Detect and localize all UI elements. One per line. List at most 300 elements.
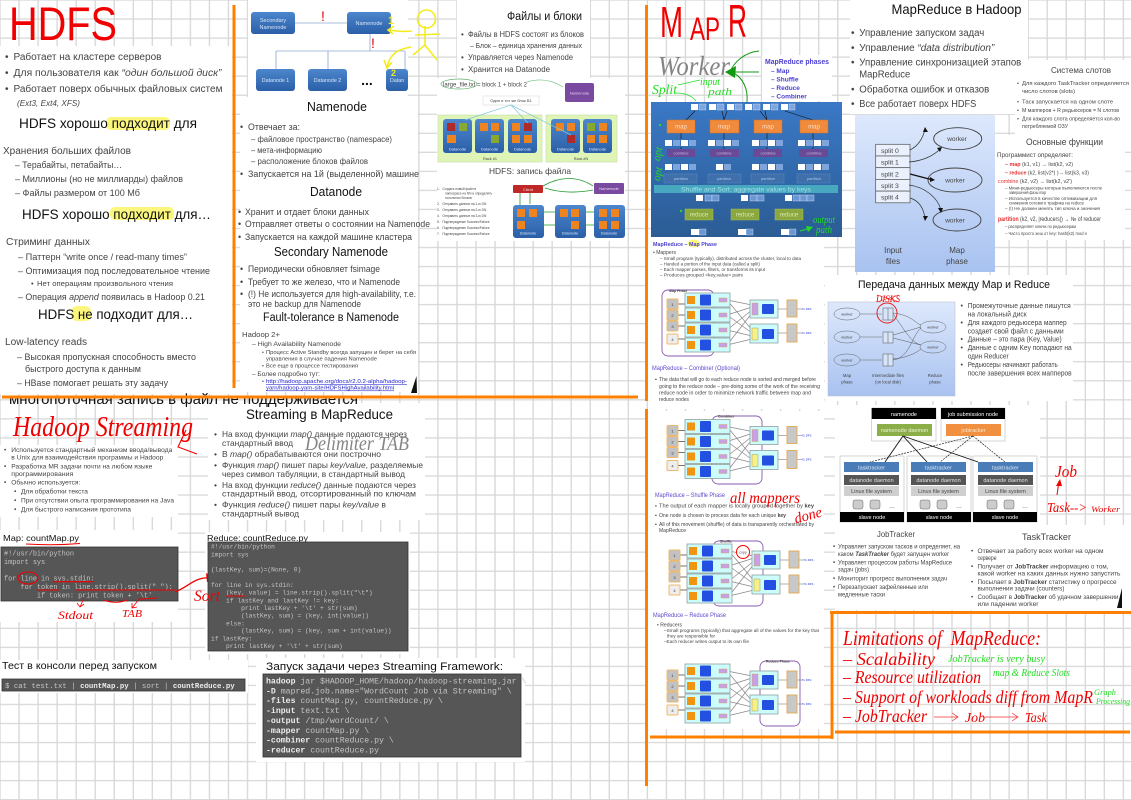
note: DISKS crossed out with circle (875, 294, 900, 323)
panel: files and blocks: – Блок – единица хранения данных (470, 43, 582, 50)
note: Job Task Worker (1047, 462, 1121, 516)
panel: reduce text: • Reducers (657, 622, 683, 628)
diagram: intermediate files: worker (841, 358, 853, 362)
panel: Datanode: Хранит и отдает блоки данных (245, 207, 369, 217)
diagram: hadoop cluster: slave node (992, 515, 1018, 521)
panel: Fault-tolerance: управления в случае падения Namenode (266, 356, 377, 362)
diagram: splits to workers: split 2 (881, 171, 899, 178)
panel: HDFS not suitable: – Высокая пропускная способность вместо (17, 352, 196, 363)
panel: Namenode: • (240, 122, 243, 132)
panel: HDFS file write: HDFS: запись файла (489, 166, 571, 176)
panel: Streaming in MapReduce: Функция map() пишет пары key/value, разделяемые (222, 460, 423, 470)
panel: HDFS suitable for big files: – Файлы размером от 100 Мб (15, 188, 141, 199)
panel: main functions: – Мини-редьюсеры которые выполняются после (1005, 186, 1103, 190)
panel: shuffle text: MapReduce (659, 528, 686, 534)
panel: HDFS overview: • (5, 68, 9, 79)
panel: HDFS file write: 1. Создать новый файл в (437, 187, 476, 191)
panel: shuffle text: ▪ (655, 504, 657, 510)
diagram: hadoop cluster (840, 408, 1037, 522)
panel: Datanode: Datanode (310, 185, 362, 199)
diagram: splits to workers: split 3 (881, 183, 899, 190)
diagram: hadoop cluster: … (1022, 504, 1028, 510)
note: Job Task Worker: Job (1055, 462, 1077, 481)
panel: Streaming in MapReduce: • (214, 429, 217, 439)
note: split and input path (652, 76, 733, 101)
diagram: namenode architecture: ! (321, 8, 325, 24)
panel: combiner text: reduce nodes (659, 397, 689, 403)
panel: HDFS file write (437, 166, 625, 238)
panel: Streaming in MapReduce: На вход функции map() данные подаются через (222, 429, 407, 439)
panel: Map phase text: MapReduce – Map Phase (653, 242, 717, 248)
panel: Datanode: Отправляет ответы о состоянии на Namenode (245, 219, 430, 229)
panel: Secondary Namenode: это не backup для Namenode (248, 299, 361, 309)
panel: combiner text (652, 366, 820, 403)
panel: Fault-tolerance (242, 312, 416, 392)
diagram: hadoop cluster: jobtracker (960, 428, 986, 434)
diagram: hadoop cluster: tasktracker (925, 466, 952, 472)
chart: MapReduce data flow: map (675, 124, 687, 130)
diagram: blocks across racks: Datanode (449, 146, 467, 152)
panel: Secondary Namenode: Требует то же железо, что и Namenode (248, 277, 400, 287)
note: output path and opt marks: output (813, 215, 835, 226)
code: reduce script: (lastKey, sum) = (key, sum + int(value)) (211, 628, 391, 635)
diagram: namenode architecture: Namenode (260, 25, 286, 31)
panel: streaming overview: • (14, 498, 17, 504)
panel: limitations of MapReduce: Limitations of MapReduce: (842, 626, 1041, 650)
panel: HDFS suitable for big files: HDFS хорошо подходит для (19, 116, 197, 131)
panel: HDFS not suitable (5, 306, 196, 389)
panel: Streaming in MapReduce: через символ табуляции, в стандартный вывод (222, 469, 405, 479)
panel: data transfer bullets: • (960, 362, 964, 369)
panel: TaskTracker: Посылает в JobTracker статистику о прогрессе (978, 579, 1117, 586)
panel: HDFS suitable for streaming: Стриминг данных (6, 237, 90, 248)
panel: slots system: • (1017, 81, 1019, 87)
code: streaming framework command: -reducer countReduce.py (266, 746, 379, 756)
code: map script: #!/usr/bin/python (4, 550, 74, 558)
diagram: intermediate files: Intermediate files (872, 373, 904, 378)
code: reduce script: if lastKey and lastKey != key: (211, 597, 339, 604)
code: reduce script: #!/usr/bin/python (211, 544, 275, 551)
chart: MapReduce data flow: combine (760, 150, 776, 156)
code: reduce script: (lastKey, sum)=(None, 0) (211, 567, 301, 574)
panel: Namenode: – расположение блоков файлов (251, 157, 368, 166)
chart: MapReduce data flow: reduce (690, 212, 709, 218)
legend: MapReduce phases (765, 59, 829, 100)
panel: JobTracker: JobTracker (877, 530, 915, 539)
diagram: namenode architecture: ... (361, 72, 373, 88)
panel: reduce text: MapReduce – Reduce Phase (653, 613, 727, 619)
panel: TaskTracker: сервере (978, 555, 997, 562)
panel: Secondary Namenode: Secondary Namenode (274, 245, 388, 259)
panel: HDFS overview: Работает на кластере серверов (14, 51, 162, 63)
panel: shuffle text: The output of each mapper is locally grouped together by key (659, 504, 814, 510)
panel: HDFS suitable for streaming: – Паттерн “write once / read-many times” (18, 252, 187, 263)
panel: files and blocks: Управляется через Namenode (468, 53, 574, 62)
code: reduce script: for line in sys.stdin: (211, 582, 294, 589)
panel: data transfer bullets: Данные с одним Key попадают на (968, 345, 1072, 352)
panel: main functions: – map (k1, v1) → list(k2, v2) (1005, 162, 1073, 168)
code: streaming framework command: -combiner countReduce.py \ (266, 736, 394, 746)
panel: main functions: combine (k2, v2) → list(k2, v2') (998, 179, 1072, 185)
diagram: splits to workers: files (886, 257, 900, 266)
diagram: intermediate files: phase (929, 380, 941, 384)
code: map script: if token: print token + '\t' (4, 592, 152, 600)
icon: yellow stick figure with arrows: 1 (388, 15, 394, 27)
panel: data transfer bullets: • (960, 320, 964, 327)
panel: Fault-tolerance: – High Availability Namenode (252, 341, 341, 348)
panel: JobTracker: • (833, 576, 835, 582)
panel: data transfer bullets: один Reducer (968, 354, 1009, 360)
panel: TaskTracker: TaskTracker (1022, 532, 1071, 542)
diagram: blocks across racks: Datanode (481, 146, 499, 152)
panel: HDFS suitable for streaming: – Операция append появилась в Hadoop 0.21 (18, 292, 205, 303)
diagram: combiner flow: Combiner (718, 414, 735, 418)
chart: MapReduce data flow: Shuffle and Sort: aggregate values by keys (681, 188, 811, 194)
panel: shuffle text (655, 493, 814, 534)
panel: Streaming in MapReduce: • (214, 449, 217, 459)
icon: black corner triangle (411, 376, 417, 393)
note: output path and opt marks: opt (651, 165, 665, 182)
panel: data transfer bullets: • (960, 345, 964, 352)
panel: main functions: – Используется в качестве оптимизации для (1005, 196, 1097, 201)
panel: JobTracker: задач (jobs) (838, 568, 869, 574)
code: console test (2, 661, 245, 691)
panel: files and blocks: Файлы в HDFS состоят из блоков (468, 30, 584, 39)
panel: Namenode: • (240, 169, 243, 179)
diagram: splits to workers: worker (944, 178, 966, 184)
panel: Streaming in MapReduce: Функция reduce() пишет пары key/value в (222, 500, 386, 510)
panel: data transfer bullets: на локальный диск (968, 310, 1028, 318)
panel: Fault-tolerance: yarn/hadoop-yarn-site/HDFSHighAvailability.html (266, 386, 394, 392)
panel: slots system: • (1017, 116, 1019, 122)
panel: JobTracker: • (833, 560, 835, 566)
diagram: hadoop cluster: Linux file system (985, 489, 1026, 495)
panel: Streaming in MapReduce: На вход функции reduce() данные подаются через (222, 480, 416, 490)
diagram: shuffle flow: copy (739, 550, 747, 554)
diagram: shuffle flow: Shuffle (720, 540, 732, 544)
panel: Map phase text: – Produces grouped <key,value> pairs (660, 272, 744, 278)
panel: limitations of MapReduce: – Support of workloads diff from MapR (842, 687, 1093, 707)
diagram: intermediate files: Reduce (928, 373, 943, 378)
panel: MapReduce in Hadoop: Обработка ошибок и отказов (859, 84, 989, 96)
diagram: hadoop cluster: datanode daemon (849, 478, 894, 484)
panel: TaskTracker: какой worker на каких данных нужно запустить (978, 570, 1121, 578)
panel: combiner text: going to the reduce node – pre-doing some of the work of the receiving (659, 384, 820, 390)
diagram: hadoop cluster: tasktracker (992, 466, 1019, 472)
panel: slots system: Для каждого TaskTracker определяется (1022, 81, 1129, 87)
panel: Map phase text: – Each mapper parses, filters, or transforms its input (660, 267, 766, 272)
diagram: reduce flow (667, 660, 811, 726)
chart: MapReduce data flow (651, 102, 842, 237)
panel: main functions: завершения фазы map (1009, 190, 1047, 195)
panel: HDFS not suitable: HDFS не подходит для… (38, 307, 193, 322)
panel: HDFS file write: Datanode (520, 232, 536, 236)
panel: Streaming in MapReduce: • (214, 460, 217, 470)
panel: streaming overview: При отсутствии опыта программирования на Java (21, 498, 174, 504)
panel: Datanode: • (238, 232, 241, 242)
code: streaming framework command: hadoop jar $HADOOP_HOME/hadoop/hadoop-streaming.jar \ (266, 676, 526, 686)
panel: Fault-tolerance: • (262, 379, 264, 385)
panel: Fault-tolerance: Процесс Active Standby всегда запущен и берет на себя (266, 350, 416, 356)
diagram: splits to workers: worker (944, 218, 966, 224)
panel: HDFS suitable for streaming: Нет операциям произвольного чтения (37, 279, 173, 288)
diagram: namenode architecture (251, 8, 408, 91)
panel: Streaming in MapReduce: Streaming в MapReduce (246, 406, 393, 422)
panel: Datanode: Запускается на каждой машине кластера (245, 232, 412, 242)
panel: Streaming in MapReduce: • (214, 500, 217, 510)
diagram: map phase flow: Map Phase (669, 289, 687, 293)
note: split and input path: path (707, 86, 733, 98)
panel: Datanode: • (238, 219, 241, 229)
diagram: blocks across racks: Rack #N (574, 157, 589, 161)
code: reduce script: print lastKey + '\t' + str(sum) (211, 643, 343, 650)
panel: HDFS overview: • (5, 52, 9, 63)
panel: combiner text: The data that will go to each reduce node is sorted and merged before (659, 377, 816, 383)
panel: Secondary Namenode: • (240, 264, 243, 274)
panel: shuffle text: ▪ (655, 513, 657, 519)
panel: shuffle text: ▪ (655, 522, 657, 528)
panel: streaming overview: в Unix для взаимодействия программы и Hadoop (11, 454, 164, 462)
panel: streaming overview: программирования (11, 471, 74, 478)
code: console test: $ cat test.txt | countMap.py | sort | countReduce.py (5, 683, 235, 691)
chart: MapReduce data flow: combine (716, 150, 732, 156)
panel: MapReduce in Hadoop: • (851, 99, 855, 110)
panel: Fault-tolerance: Hadoop 2+ (242, 330, 281, 339)
panel: Map phase text (653, 240, 801, 278)
note: split and input path: Split (652, 83, 678, 98)
panel: Secondary Namenode: • (240, 289, 243, 299)
panel: TaskTracker: • (971, 548, 973, 555)
panel: Streaming in MapReduce: стандартный ввод (222, 438, 293, 448)
code: console test: Тест в консоли перед запуском (2, 661, 157, 672)
text: clipped slide line under divider: многопоточная запись в файл не поддерживается (9, 391, 358, 408)
panel: data transfer bullets: Промежуточные данные пишутся (968, 303, 1071, 310)
panel: Secondary Namenode: (!) Не используется для high-availability, т.е. (248, 289, 416, 299)
panel: JobTracker: • (833, 585, 835, 591)
diagram: map phase flow (662, 289, 811, 356)
panel: JobTracker: медленные таски (838, 592, 885, 598)
diagram: hadoop cluster: job submission node (947, 412, 998, 418)
panel: streaming overview: Используется стандартный механизм ввода/вывода (11, 446, 173, 454)
panel: Secondary Namenode (240, 245, 416, 309)
chart: MapReduce data flow: reduce (780, 212, 799, 218)
panel: TaskTracker: • (971, 564, 973, 570)
panel: streaming overview (4, 446, 174, 514)
diagram: hadoop cluster: Linux file system (918, 489, 959, 495)
panel: files and blocks: • (461, 30, 464, 39)
diagram: splits to workers: split 1 (881, 160, 899, 167)
panel: shuffle text: MapReduce – Shuffle Phase (655, 493, 726, 499)
panel: MapReduce in Hadoop (851, 1, 1022, 110)
panel: HDFS suitable for streaming: – Оптимизация под последовательное чтение (18, 266, 210, 277)
diagram: namenode architecture: Datanode 2 (314, 78, 341, 84)
diagram: blocks across racks: Один и тот же блок B1 (490, 98, 533, 103)
panel: Streaming in MapReduce: стандартный ввод, отсортированный по ключам (222, 488, 416, 498)
panel: Namenode: Namenode (307, 100, 367, 114)
panel: streaming overview: • (4, 464, 7, 470)
panel: data transfer bullets: Редьюсеры начинают работать (968, 361, 1058, 369)
panel: files and blocks: • (461, 65, 464, 74)
panel: shuffle text: All of this movement (shuffle) of data is transparently orchestrated by (659, 522, 814, 528)
note: Job Task Worker: Worker (1091, 505, 1121, 514)
panel: Fault-tolerance: – Более подробно тут: (252, 370, 320, 378)
code: map script: TAB (122, 608, 142, 620)
code: map script: import sys (4, 559, 45, 567)
panel: Namenode: – файловое пространство (namespace) (251, 135, 392, 144)
diagram: blocks across racks: Datanode (514, 146, 532, 152)
diagram: splits to workers (855, 115, 995, 272)
panel: JobTracker: Управляет процессом работы MapReduce (838, 560, 953, 566)
panel: data transfer bullets: • (960, 336, 964, 344)
panel: main functions: partition (k2, v2, |reducers|) → № of reducer (998, 216, 1101, 223)
panel: HDFS overview: • (5, 84, 9, 95)
panel: MapR title (660, 0, 747, 47)
note: Worker handwriting: Worker (658, 51, 730, 81)
panel: files and blocks: • (461, 53, 464, 62)
diagram: namenode architecture: ! (371, 35, 375, 51)
panel: slots system (1017, 65, 1129, 130)
panel: limitations of MapReduce: Task (1025, 711, 1048, 726)
diagram: splits to workers: Input (884, 246, 903, 255)
panel: limitations of MapReduce (842, 626, 1130, 726)
diagram: splits to workers: phase (946, 257, 968, 266)
panel: MapReduce in Hadoop: MapReduce в Hadoop (892, 1, 1022, 17)
panel: JobTracker: Перезапускает зафейленные или (838, 584, 928, 591)
panel: HDFS file write: Datanode (601, 232, 617, 236)
panel: JobTracker: • (833, 544, 835, 550)
panel: reduce text: –Small programs (typically) that aggregate all of the values for the key that (664, 628, 820, 633)
panel: HDFS overview: Работает поверх обычных файловых систем (14, 83, 223, 95)
panel: Map phase text: • Mappers (653, 250, 677, 256)
panel: slots system: число слотов (slots) (1022, 89, 1075, 95)
panel: TaskTracker: • (971, 579, 973, 586)
code: map script: for token in line.strip().split(" "): (4, 584, 173, 592)
panel: slots system: потребляемой ОЗУ (1022, 123, 1068, 130)
chart: MapReduce data flow: combine (673, 150, 689, 156)
note: output path and opt marks: path (815, 225, 832, 236)
panel: JobTracker: каком TaskTracker будет запущен worker (838, 552, 949, 558)
diagram: splits to workers: split 4 (881, 195, 899, 202)
note: split and input path: input (700, 76, 721, 88)
panel: HDFS file write: топологию блоков (445, 196, 472, 200)
diagram: hadoop cluster: … (889, 504, 895, 510)
diagram: intermediate files: Map (843, 373, 852, 378)
code: streaming framework command: -output /tmp/wordCount/ \ (266, 716, 389, 726)
panel: data transfer bullets: создает свой файл с данными (968, 328, 1064, 336)
panel: HDFS suitable for big files: – Терабайты, петабайты… (15, 160, 122, 171)
chart: MapReduce data flow: partition (717, 176, 731, 181)
panel: limitations of MapReduce: map & Reduce Slots (993, 667, 1070, 679)
panel: JobTracker: Мониторит прогресс выполнения задач (838, 576, 947, 582)
panel: HDFS file write: 5. Подтверждение Success/Failure (437, 220, 490, 224)
panel: Fault-tolerance: Fault-tolerance в Namenode (263, 312, 399, 324)
panel: HDFS overview: Для пользователя как “один большой диск” (14, 67, 222, 79)
diagram: intermediate files: worker (927, 326, 939, 330)
diagram: namenode architecture: Datan (390, 78, 404, 84)
panel: MapReduce in Hadoop: • (851, 28, 855, 39)
panel: streaming overview: Для обработки текста (21, 488, 88, 496)
panel: slots system: Система слотов (1051, 65, 1111, 75)
panel: HDFS overview (5, 51, 223, 108)
diagram: splits to workers: Map (949, 246, 965, 255)
panel: reduce text: –Each reducer writes output to its own file (664, 639, 749, 644)
panel: Datanode: • (238, 207, 241, 217)
panel: HDFS file write: 7. Подтверждение Success/Failure (437, 232, 490, 236)
panel: data transfer bullets: Данные – это пара (Key, Value) (968, 336, 1062, 344)
code: streaming framework command: -files countMap.py, countReduce.py \ (266, 696, 443, 706)
diagram: hadoop cluster: slave node (859, 515, 885, 521)
panel: Namenode: Запускается на 1й (выделенной) машине (248, 169, 419, 179)
chart: MapReduce data flow: partition (807, 176, 821, 181)
panel: main functions: – reduce (k2, list(v2*) )→ list(k3, v3) (1005, 170, 1089, 176)
note: all mappers done: all mappers (730, 490, 800, 507)
panel: limitations of MapReduce: JobTracker is very busy (948, 654, 1046, 665)
panel: MapReduce in Hadoop: MapReduce (859, 70, 911, 80)
panel: streaming overview: • (4, 480, 7, 486)
panel: main functions: – распределяет ключи по редьюсерам (1005, 224, 1076, 229)
note: Job Task Worker: Task--> (1047, 501, 1087, 516)
panel: streaming overview: • (4, 447, 7, 454)
chart: MapReduce data flow: map (808, 124, 820, 130)
arrows: green pointers to Worker (725, 51, 759, 102)
panel: reduce text (653, 613, 820, 644)
diagram: blocks across racks: Datanode (557, 146, 575, 152)
panel: main functions (997, 137, 1103, 236)
panel: main functions: снижения сетевого трафика на reduce (1009, 200, 1085, 206)
panel: reduce text: they are responsible for (667, 634, 715, 638)
note: delimiter TAB: Delimiter TAB (304, 433, 409, 455)
diagram: hadoop cluster: namenode daemon (881, 428, 928, 434)
panel: TaskTracker: Отвечает за работу всех worker на одном (978, 547, 1104, 555)
panel: TaskTracker: Получает от JobTracker информацию о том, (978, 564, 1109, 570)
panel: MapReduce in Hadoop: • (851, 43, 855, 54)
panel: HDFS file write: namespace на NN и определить (445, 192, 493, 196)
code: reduce script: if lastKey: (211, 635, 252, 642)
panel: HDFS file write: Client (523, 187, 534, 192)
note: all mappers done (730, 490, 824, 527)
diagram: blocks across racks: large_file.txt = block 1 + block 2 (443, 82, 528, 88)
diagram: namenode architecture: Namenode (356, 21, 382, 27)
panel: data transfer bullets: • (960, 303, 964, 310)
panel: MapReduce in Hadoop: Управление запуском задач (859, 28, 984, 39)
panel: files and blocks (461, 11, 584, 74)
panel: HDFS overview: (Ext3, Ext4, XFS) (17, 98, 80, 108)
chart: MapReduce data flow: partition (761, 176, 775, 181)
legend: MapReduce phases: – Shuffle (771, 76, 799, 84)
icon: yellow stick figure with arrows: 2 (391, 68, 396, 78)
panel: HDFS not suitable: – HBase помогает решать эту задачу (17, 378, 168, 389)
panel: limitations of MapReduce: – Resource utilization (842, 667, 981, 687)
diagram: blocks across racks (438, 79, 617, 162)
panel: HDFS suitable for big files: – Миллионы (но не миллиарды) файлов (15, 174, 183, 185)
panel: MapReduce in Hadoop: Управление синхронизацией этапов (859, 58, 1021, 68)
diagram: splits to workers: worker (946, 136, 968, 143)
code: streaming framework command (263, 661, 526, 757)
panel: MapReduce in Hadoop: Все работает поверх HDFS (859, 98, 977, 110)
panel: Streaming in MapReduce: • (214, 480, 217, 490)
note: all mappers done: done (793, 505, 824, 527)
code: reduce script: (lastKey, sum) = (key, int(value)) (211, 613, 369, 620)
panel: MapReduce in Hadoop: • (851, 58, 855, 68)
code: reduce script: else: (211, 620, 245, 627)
panel: Map phase text: – Handed a portion of the input data (called a split) (660, 262, 760, 266)
panel: Namenode: – мета-информацию (251, 146, 322, 155)
panel: HDFS file write: 4. Отправить данные на 3-ю DN (437, 214, 487, 218)
chart: MapReduce data flow: partition (674, 176, 688, 181)
panel: Secondary Namenode: Периодически обновляет fsimage (248, 264, 380, 274)
diagram: intermediate files: worker (841, 312, 853, 316)
diagram: intermediate files: (on local disk) (875, 380, 902, 384)
